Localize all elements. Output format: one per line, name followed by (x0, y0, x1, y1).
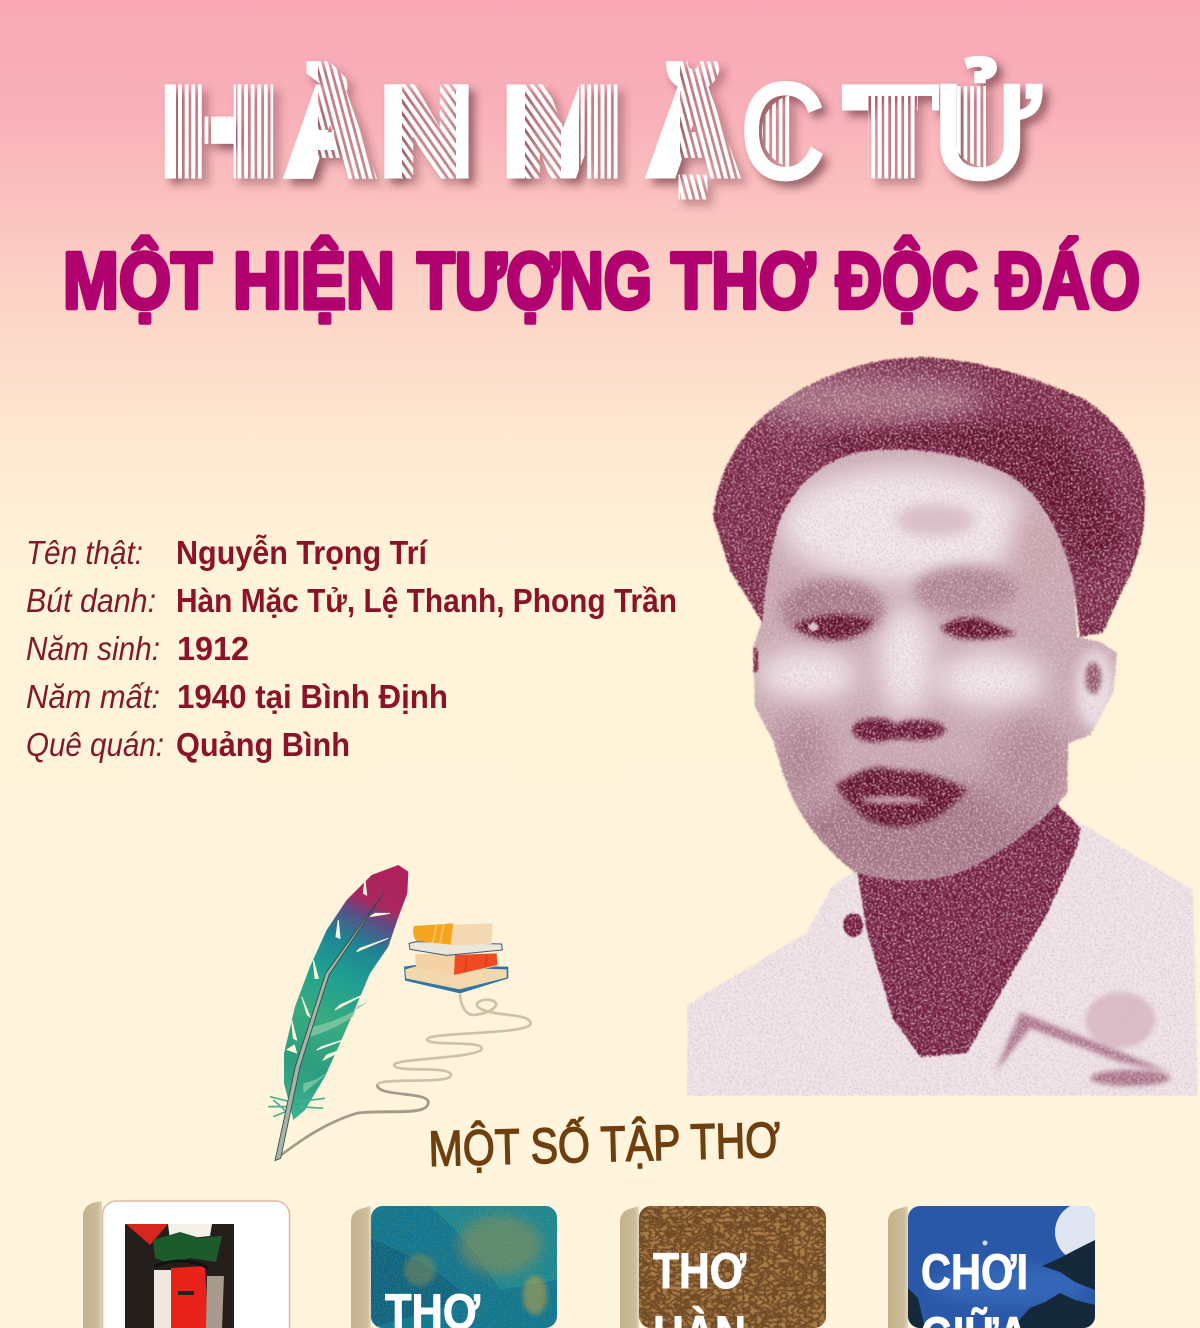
title: Hàn Mặc Tử: Ặ (651, 66, 735, 198)
subtitle: HIỆN (233, 236, 395, 325)
neck shadow (857, 804, 1080, 1057)
biography details: Bút danh: (26, 582, 156, 619)
feather down (268, 1097, 325, 1117)
feather vane (284, 865, 408, 1120)
title: Hàn Mặc Tử (163, 55, 1046, 207)
book 2 cover (371, 1206, 557, 1328)
C inner stripes (762, 95, 792, 168)
book 4 title: CHƠI (921, 1244, 1028, 1300)
left eye (780, 580, 884, 640)
books stack (404, 923, 508, 993)
book 3 title (653, 1243, 746, 1328)
book 3 cover (639, 1206, 826, 1328)
book 3 title: THƠ (653, 1243, 746, 1299)
biography details: 1940 tại Bình Định (177, 678, 448, 715)
book 4 (888, 1206, 1095, 1328)
nose (852, 718, 945, 742)
shirt (687, 814, 1198, 1096)
subtitle: TƯỢNG (417, 236, 652, 325)
book 4 cover (908, 1206, 1095, 1328)
feather slits (287, 880, 390, 1060)
title: Hàn Mặc Tử: N (383, 66, 470, 198)
title: Hàn Mặc Tử: Ử (932, 58, 1046, 207)
left ear (753, 648, 758, 672)
portrait of Hàn Mặc Tử (687, 350, 1198, 1096)
biography details: Quê quán: (26, 726, 164, 763)
biography details: Nguyễn Trọng Trí (176, 534, 429, 571)
book 3 (620, 1206, 826, 1328)
face (740, 440, 1130, 890)
heading: Một số tập thơ: MỘT SỐ TẬP THƠ (428, 1111, 781, 1177)
U inner stripes (950, 86, 986, 168)
book 3 spine (620, 1206, 639, 1328)
collar button (843, 913, 863, 937)
title: Hàn Mặc Tử: T (848, 66, 933, 198)
book 4 spine (888, 1206, 908, 1328)
book 2 spine (351, 1206, 371, 1328)
mouth (835, 768, 967, 827)
biography details: 1912 (177, 630, 249, 667)
book 4 title (921, 1244, 1028, 1328)
biography details (26, 534, 677, 763)
subtitle: MỘT (63, 236, 212, 325)
book 1 cover (102, 1201, 290, 1328)
feather shaft (275, 893, 384, 1161)
biography details: Tên thật: (26, 534, 143, 571)
title: Hàn Mặc Tử: C (740, 55, 825, 207)
icon: feather quill and books (268, 865, 531, 1161)
biography details: Hàn Mặc Tử, Lệ Thanh, Phong Trần (176, 582, 677, 619)
subtitle: ĐỘC (836, 236, 978, 325)
biography details: Quảng Bình (176, 726, 350, 763)
book 1 (83, 1201, 290, 1328)
biography details: Năm sinh: (26, 630, 160, 667)
subtitle: ĐÁO (996, 236, 1140, 325)
book 1 spine (83, 1201, 102, 1328)
subtitle: THƠ (671, 236, 816, 325)
title: Hàn Mặc Tử: À (289, 66, 371, 198)
feather light bands (303, 1002, 368, 1093)
right eye (913, 566, 1017, 639)
T stem stripes (868, 92, 915, 178)
title: Hàn Mặc Tử: H (163, 66, 275, 198)
title: Hàn Mặc Tử: M (505, 66, 621, 198)
collar marks (995, 992, 1170, 1086)
subtitle (63, 236, 1140, 325)
ink line lower part (277, 1085, 428, 1158)
biography details: Năm mất: (26, 678, 160, 715)
right ear (1085, 662, 1101, 694)
hair (712, 356, 1146, 638)
book 1 painting (125, 1224, 234, 1328)
ink line (357, 994, 531, 1113)
book 2 (351, 1206, 557, 1328)
